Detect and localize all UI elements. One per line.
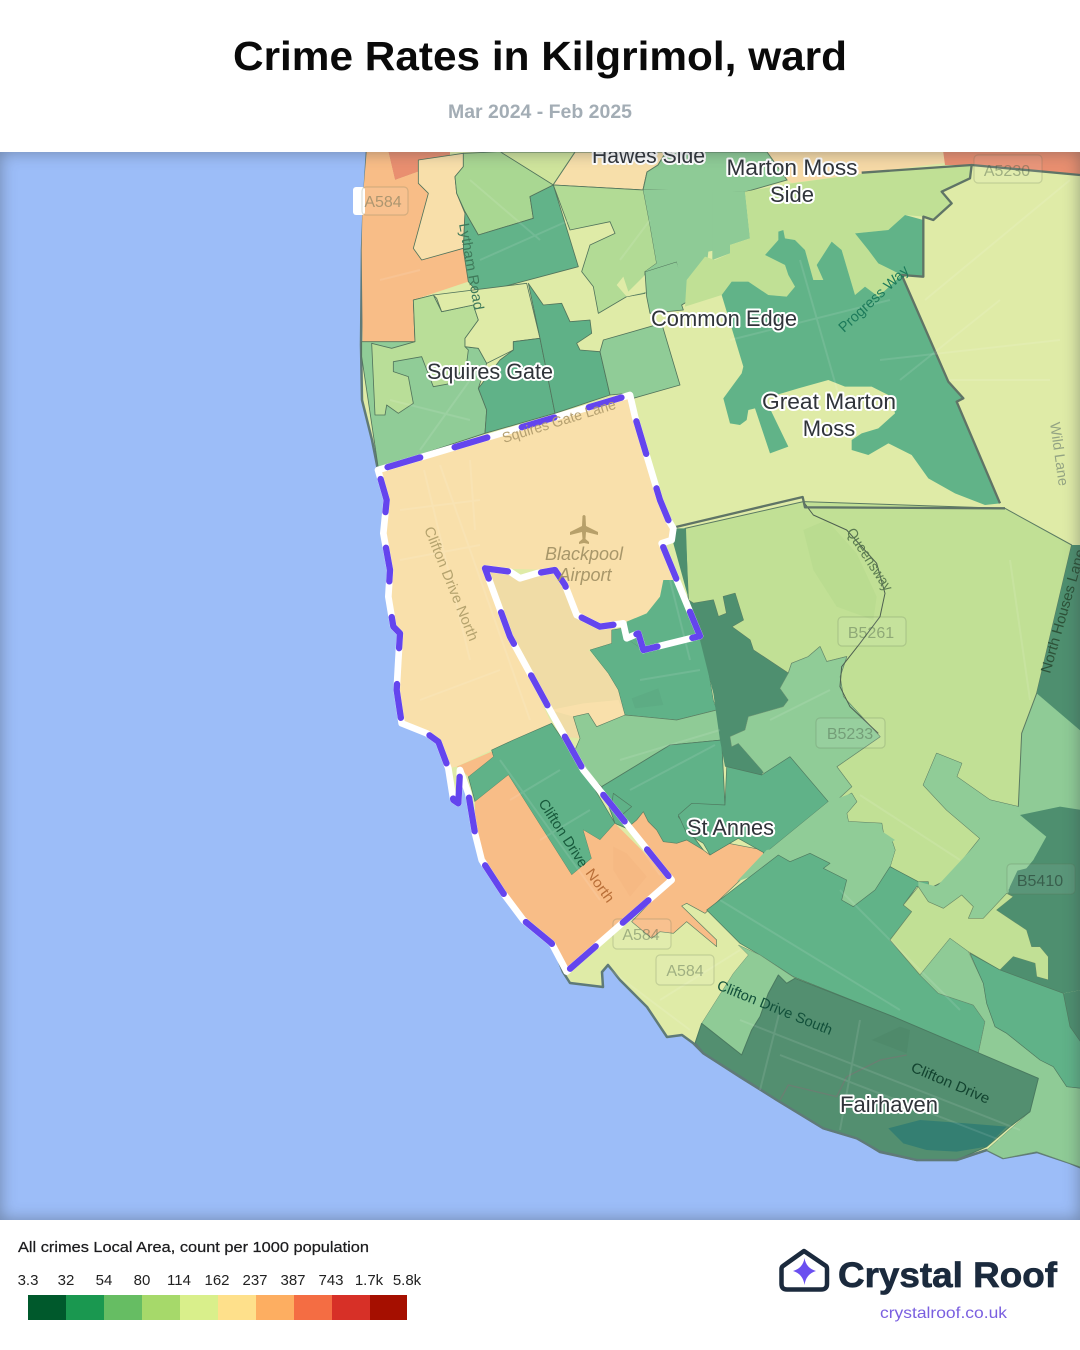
road badge: B5410 [1007, 864, 1075, 894]
road label: Queensway: Queensway [843, 525, 896, 595]
legend value labels: 54 [96, 1272, 112, 1289]
road badge: A5230 [974, 155, 1042, 183]
ward boundary: white line with purple dashes [378, 395, 700, 972]
crime-rate areas: east of the airport [670, 497, 1080, 910]
place label: Squires Gate: Squires Gate [427, 359, 553, 384]
place label: Marton Moss Side: Side [770, 182, 814, 207]
legend value labels: 1.7k [355, 1272, 384, 1289]
place label: St Annes: St Annes [687, 815, 774, 840]
sea [0, 152, 1080, 1220]
legend value labels: 80 [134, 1272, 150, 1289]
place label: Common Edge: Common Edge [651, 306, 797, 331]
road badge: B5261 [838, 617, 906, 646]
place label: Great Marton Moss: Great Marton [762, 389, 896, 414]
road badge: A584 St Annes: A584 [622, 927, 660, 944]
road badge: B5233: B5233 [827, 726, 873, 743]
road badge: B5410: B5410 [1017, 873, 1063, 890]
title: Crime Rates in Kilgrimol, ward [233, 33, 847, 79]
road label: Wild Lane: Wild Lane [1046, 421, 1071, 487]
road label: Clifton Drive South: Clifton Drive South [715, 978, 835, 1039]
road badge: A584 south [656, 955, 714, 985]
road label: Squires Gate Lane: Squires Gate Lane [500, 397, 618, 447]
crime-rate areas: north-west, Squires Gate [362, 152, 717, 468]
website link: crystalroof.co.uk [880, 1305, 1008, 1322]
airport label [545, 544, 624, 585]
place label: Fairhaven: Fairhaven [840, 1092, 938, 1117]
map edge shadow [0, 152, 1080, 1220]
road texture lines [380, 180, 1070, 1140]
crime-rate areas: Marton Moss and Great Marton Moss [685, 165, 1080, 505]
road label: Clifton Drive lower: Clifton Drive [535, 796, 591, 871]
logo icon: house with star [782, 1251, 827, 1290]
road label: North lower: North [582, 866, 617, 906]
road label: Clifton Drive Fairhaven: Clifton Drive [908, 1060, 992, 1108]
legend value labels: 237 [242, 1272, 268, 1289]
legend value labels: 162 [204, 1272, 230, 1289]
road badge: B5233 [816, 718, 885, 748]
road label: Lytham Road: Lytham Road [455, 222, 486, 311]
land base [361, 150, 1080, 1168]
crime-rate areas: south coast and Fairhaven [695, 830, 1080, 1167]
legend value labels: 743 [318, 1272, 344, 1289]
legend value labels: 114 [167, 1272, 191, 1289]
footer panel [18, 1239, 1058, 1322]
place label: Great Marton Moss: Moss [803, 416, 855, 441]
airport label: Airport [557, 565, 613, 585]
road badge: A584 north [353, 187, 408, 215]
road label: Progress Way: Progress Way [836, 262, 913, 336]
road badge: A584 St Annes [613, 919, 671, 949]
legend value labels [18, 1272, 422, 1289]
map panel [0, 152, 1080, 1220]
road badge: A584 south: A584 [666, 963, 704, 980]
airport label: Blackpool [545, 544, 624, 564]
legend colour scale [28, 1295, 407, 1320]
subtitle: date range: Mar 2024 - Feb 2025 [448, 102, 632, 123]
place label: Marton Moss Side: Marton Moss [726, 155, 858, 180]
crime-rate areas: ward and neighbouring west side [378, 395, 763, 972]
legend value labels: 32 [58, 1272, 74, 1289]
icon: airport plane [570, 515, 598, 544]
road badge: A584 north: A584 [364, 194, 402, 211]
legend value labels: 387 [280, 1272, 306, 1289]
logo wordmark: Crystal Roof [838, 1256, 1057, 1295]
legend title: All crimes Local Area, count per 1000 population [18, 1239, 369, 1256]
crime-rate areas: north top strip [500, 150, 1080, 192]
legend value labels: 5.8k [393, 1272, 422, 1289]
legend value labels: 3.3 [18, 1272, 38, 1289]
road label: Clifton Drive North upper: Clifton Drive North [420, 525, 481, 644]
road badge: B5261: B5261 [848, 625, 894, 642]
road badge: A5230: A5230 [984, 163, 1030, 180]
